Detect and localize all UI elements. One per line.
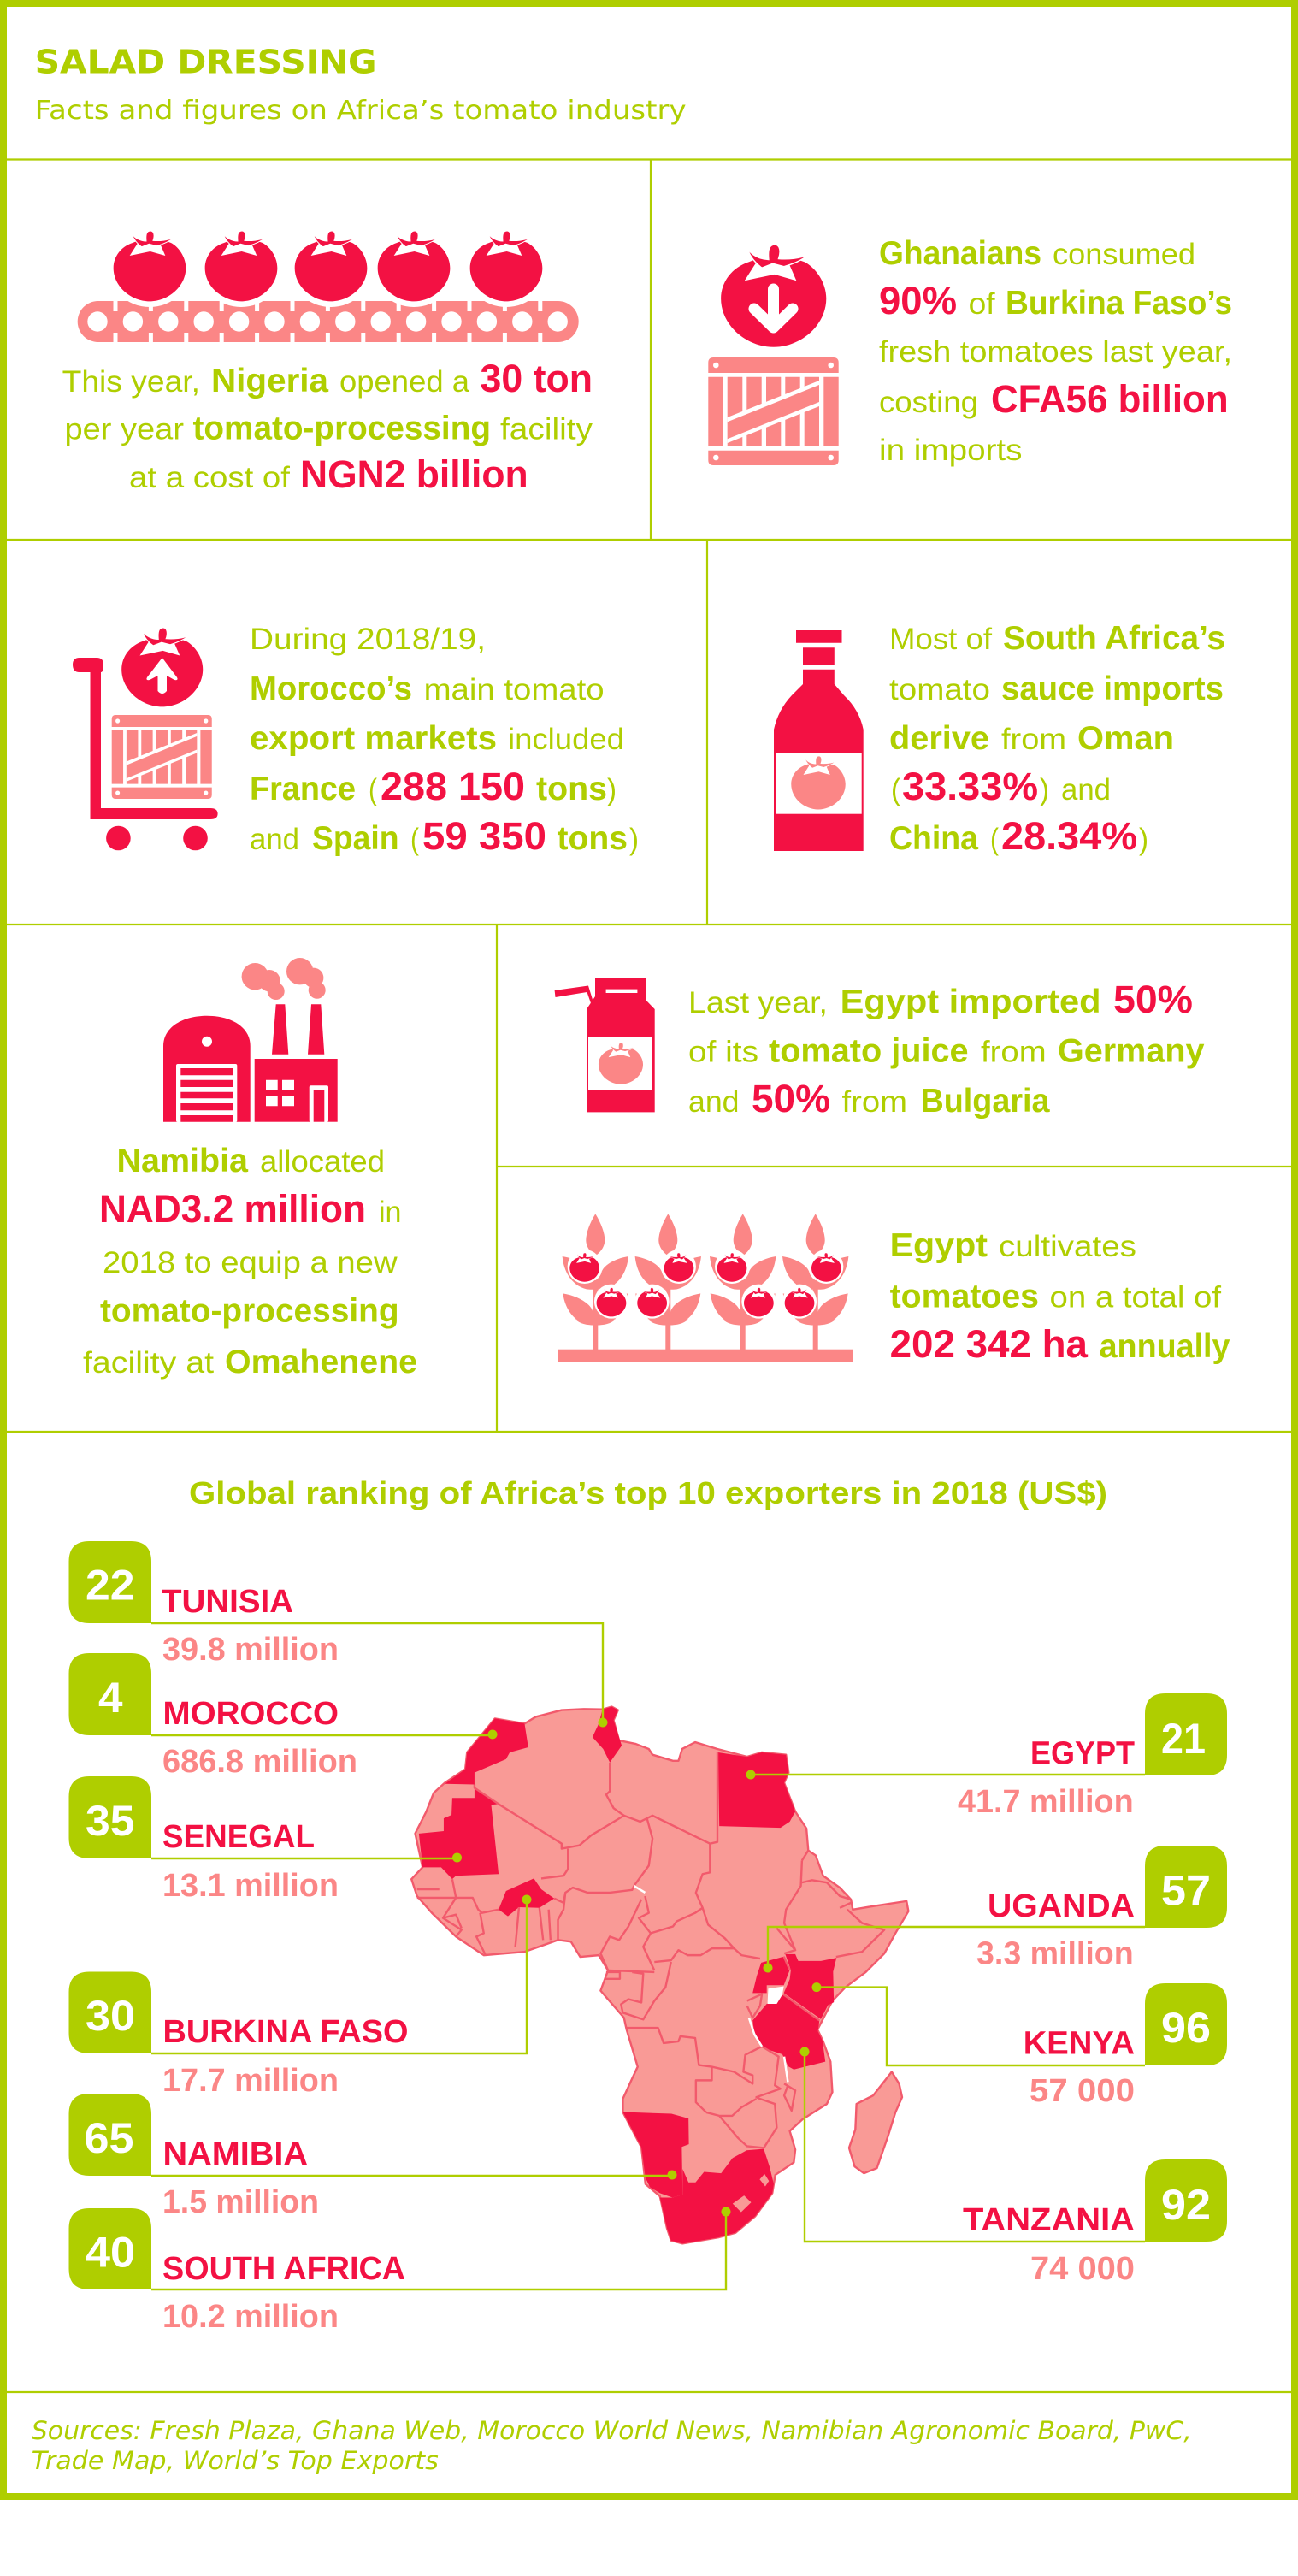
- badge: Morocco: MOROCCO: [162, 1696, 339, 1732]
- text: Morocco fact: main tomato: [424, 673, 605, 706]
- text: Morocco fact: export markets: [250, 720, 497, 757]
- text: Ghana fact: in imports: [879, 434, 1023, 467]
- badge: Senegal: SENEGAL: [162, 1819, 315, 1855]
- heading: global ranking: Global ranking of Africa’s top 10 exporters in 2018 (US$): [189, 1475, 1107, 1510]
- icon: tomato plants: [558, 1214, 853, 1362]
- icon: conveyor with tomatoes: [78, 230, 579, 344]
- badge: Kenya: [1024, 1983, 1227, 2109]
- badge: Namibia: 65: [84, 2114, 133, 2162]
- text: South Africa fact: tomato: [889, 673, 990, 706]
- text: Namibia fact: tomato-processing: [100, 1293, 399, 1329]
- text: Nigeria fact: Nigeria: [211, 363, 328, 399]
- text: Morocco fact: Morocco’s: [250, 671, 412, 707]
- location dots: [452, 1717, 821, 2217]
- text: South Africa fact: Most of: [889, 623, 992, 656]
- text: Egypt cultivation fact: annually: [1100, 1328, 1230, 1365]
- text: Egypt juice fact: of its: [688, 1035, 758, 1069]
- text: South Africa fact: 28.34%: [1001, 814, 1137, 858]
- badge: South Africa: SOUTH AFRICA: [162, 2251, 405, 2287]
- badge: Egypt: 41.7 million: [958, 1784, 1134, 1820]
- badge: Uganda: [976, 1846, 1227, 1972]
- badge: Egypt: 21: [1161, 1715, 1206, 1763]
- text: Namibia fact: Omahenene: [225, 1344, 417, 1380]
- text: Namibia fact: in: [379, 1196, 402, 1229]
- badge: South Africa: 40: [86, 2229, 135, 2277]
- text: Egypt cultivation fact: 202 342 ha: [890, 1322, 1089, 1366]
- text: South Africa fact: sauce imports: [1001, 671, 1224, 707]
- text: Nigeria fact: at a cost of: [129, 461, 290, 494]
- text: Egypt juice fact: tomato juice: [769, 1033, 969, 1069]
- badge: Tunisia: TUNISIA: [162, 1584, 293, 1620]
- panel: Egypt juice imports: [555, 978, 1205, 1120]
- text: Egypt cultivation fact: tomatoes: [890, 1278, 1039, 1315]
- panel: Nigeria processing facility: [62, 230, 593, 496]
- text: Namibia fact: NAD3.2 million: [99, 1187, 366, 1231]
- badge: Tunisia: [68, 1541, 339, 1668]
- text: Nigeria fact: This year,: [62, 365, 200, 399]
- text: Egypt juice fact: Germany: [1058, 1033, 1205, 1069]
- sources: [32, 2416, 1192, 2475]
- text: South Africa fact: South Africa’s: [1003, 620, 1225, 657]
- text: Ghana fact: of: [969, 287, 995, 321]
- text: Egypt juice fact: 50%: [1113, 978, 1193, 1021]
- text: Morocco fact: ): [607, 773, 617, 806]
- text: Nigeria fact: facility: [500, 412, 593, 446]
- text: Ghana fact: CFA56 billion: [991, 377, 1229, 421]
- text: Morocco fact: France: [250, 771, 356, 807]
- badge: Namibia: [68, 2094, 319, 2220]
- sources: Trade Map, World’s Top Exports: [32, 2446, 439, 2475]
- badge: Burkina Faso: 30: [86, 1992, 135, 2040]
- badge: Senegal: 35: [86, 1797, 135, 1845]
- badge: Tanzania: TANZANIA: [963, 2202, 1135, 2238]
- text: Morocco fact: 288 150: [381, 765, 525, 808]
- text: Egypt juice fact: Bulgaria: [920, 1083, 1050, 1120]
- text: Morocco fact: tons: [536, 771, 607, 807]
- badge: Burkina Faso: [68, 1972, 409, 2099]
- text: Morocco fact: (: [369, 773, 377, 806]
- badge: Morocco: 686.8 million: [162, 1744, 357, 1780]
- text: Nigeria fact: opened a: [339, 365, 470, 399]
- panel: Ghana imports: [708, 235, 1232, 467]
- text: Namibia fact: [83, 1143, 417, 1380]
- text: Ghana fact: Ghanaians: [879, 235, 1041, 272]
- icon: juice carton with straw: [555, 978, 655, 1112]
- text: South Africa fact: (: [990, 823, 999, 856]
- panel: Morocco exports: [73, 623, 639, 858]
- text: Nigeria fact: 30 ton: [481, 357, 593, 400]
- badge: Senegal: [68, 1776, 339, 1904]
- text: South Africa fact: derive: [889, 720, 989, 757]
- text: Egypt juice fact: Egypt imported: [841, 984, 1101, 1020]
- badge: Egypt: [958, 1693, 1227, 1820]
- text: South Africa fact: ): [1040, 773, 1049, 806]
- text: Morocco fact: During 2018/19,: [250, 623, 486, 656]
- text: South Africa fact: ): [1139, 823, 1148, 856]
- badge: Tunisia: 22: [86, 1562, 135, 1610]
- text: South Africa fact: Oman: [1077, 720, 1174, 757]
- text: Morocco fact: 59 350: [422, 814, 546, 858]
- text: Ghana fact: consumed: [1053, 238, 1195, 271]
- text: Morocco fact: ): [629, 823, 639, 856]
- badge: Uganda: UGANDA: [988, 1888, 1135, 1924]
- text: South Africa fact: (: [891, 773, 900, 806]
- text: Egypt juice fact: 50%: [752, 1077, 830, 1120]
- badge: Senegal: 13.1 million: [162, 1868, 339, 1904]
- badge: Kenya: 57 000: [1030, 2073, 1135, 2109]
- panel: South Africa sauce imports: [774, 620, 1225, 858]
- text: Ghana fact: fresh tomatoes last year,: [879, 335, 1232, 369]
- badge: Namibia: NAMIBIA: [162, 2136, 308, 2172]
- map of Africa: [411, 1707, 908, 2243]
- text: Egypt cultivation fact: cultivates: [999, 1230, 1136, 1263]
- text: Morocco fact: Spain: [312, 820, 399, 857]
- badge: Namibia: 1.5 million: [162, 2184, 319, 2220]
- text: Egypt juice fact: from: [981, 1035, 1047, 1069]
- text: Namibia fact: facility at: [83, 1346, 214, 1380]
- badge: Burkina Faso: 17.7 million: [162, 2063, 339, 2099]
- badge: South Africa: 10.2 million: [162, 2299, 339, 2335]
- text: Egypt cultivation fact: Egypt: [890, 1227, 988, 1264]
- badge: Morocco: [68, 1653, 357, 1780]
- text: Morocco fact: [250, 623, 639, 858]
- text: Egypt juice fact: [688, 978, 1205, 1120]
- text: Egypt juice fact: Last year,: [688, 986, 828, 1019]
- leader lines: [151, 1623, 1145, 2289]
- badge: Burkina Faso: BURKINA FASO: [162, 2014, 409, 2050]
- badge: Kenya: KENYA: [1024, 2026, 1135, 2062]
- text: Nigeria fact: [62, 357, 593, 496]
- text: Ghana fact: [879, 235, 1232, 467]
- panel: Egypt cultivation: [558, 1214, 1230, 1366]
- text: Egypt cultivation fact: [890, 1227, 1230, 1366]
- sources: Sources: Fresh Plaza, Ghana Web, Morocco World News, Namibian Agronomic Board, PwC,: [32, 2416, 1192, 2445]
- text: South Africa fact: 33.33%: [902, 765, 1038, 808]
- text: Namibia fact: 2018 to equip a new: [103, 1246, 398, 1279]
- text: Morocco fact: included: [508, 723, 624, 756]
- text: South Africa fact: from: [1001, 723, 1066, 756]
- badge: Tanzania: 74 000: [1030, 2251, 1135, 2287]
- icon: factory: [163, 958, 338, 1122]
- badge: Kenya: 96: [1161, 2004, 1211, 2052]
- badge: Uganda: 57: [1161, 1867, 1211, 1915]
- icon: sauce bottle: [774, 630, 864, 851]
- badge: Egypt: EGYPT: [1030, 1736, 1135, 1772]
- text: Morocco fact: tons: [558, 820, 628, 857]
- icon: cart with crate and tomato: [73, 628, 218, 850]
- text: South Africa fact: China: [889, 820, 978, 857]
- badge: Morocco: 4: [98, 1674, 123, 1722]
- text: Ghana fact: costing: [879, 386, 978, 419]
- text: South Africa fact: and: [1061, 773, 1111, 806]
- badge: Tanzania: 92: [1161, 2181, 1211, 2229]
- text: Ghana fact: 90%: [879, 279, 957, 322]
- text: Namibia fact: allocated: [260, 1145, 385, 1179]
- subtitle: Facts and figures on Africa’s tomato industry: [35, 96, 687, 126]
- text: Egypt juice fact: and: [688, 1085, 739, 1119]
- title: SALAD DRESSING: [35, 44, 377, 81]
- text: Nigeria fact: tomato-processing: [193, 411, 491, 446]
- icon: tomato with down arrow above crate: [708, 245, 839, 465]
- badge: Tunisia: 39.8 million: [162, 1632, 339, 1668]
- text: Morocco fact: (: [410, 823, 419, 856]
- text: Morocco fact: and: [250, 823, 299, 856]
- badge: South Africa: [68, 2208, 405, 2335]
- panel: Namibia facility: [83, 958, 417, 1380]
- text: Egypt cultivation fact: on a total of: [1050, 1281, 1221, 1314]
- badge: Uganda: 3.3 million: [976, 1936, 1134, 1972]
- text: Egypt juice fact: from: [841, 1085, 907, 1119]
- text: Ghana fact: Burkina Faso’s: [1006, 285, 1232, 322]
- text: Namibia fact: Namibia: [116, 1143, 248, 1179]
- text: Nigeria fact: NGN2 billion: [300, 452, 528, 496]
- badge: Tanzania: [963, 2159, 1227, 2287]
- text: South Africa fact: [889, 620, 1225, 858]
- text: Nigeria fact: per year: [65, 412, 184, 446]
